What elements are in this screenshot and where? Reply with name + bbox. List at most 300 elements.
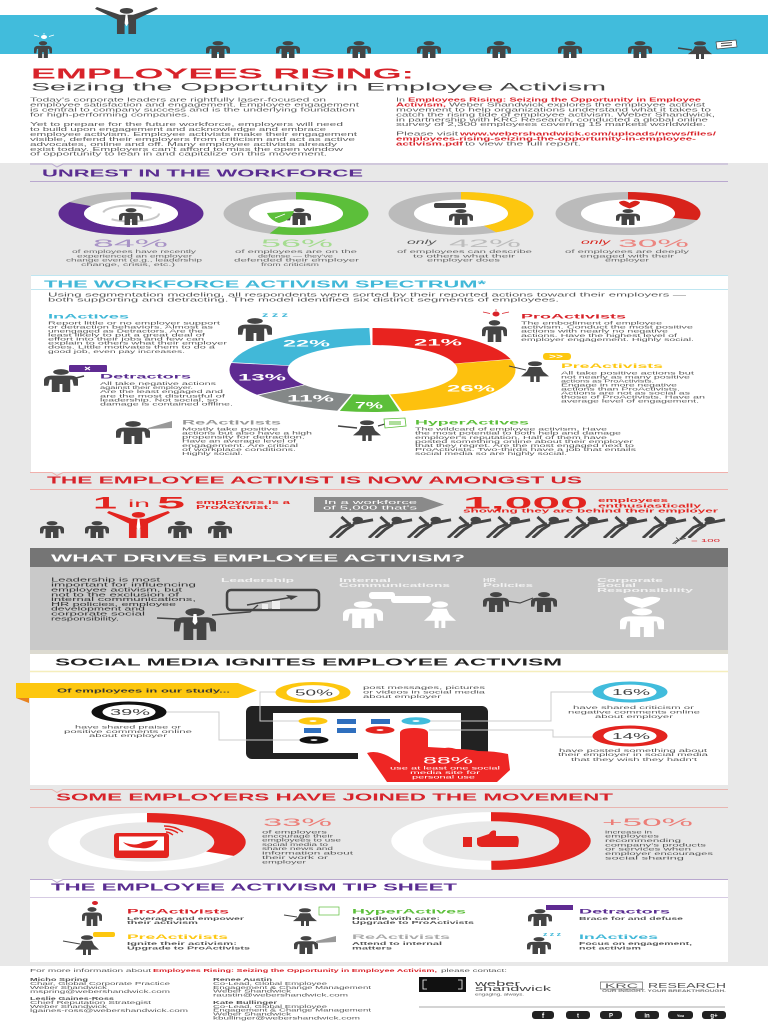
segment labels: 13% xyxy=(238,372,287,384)
PreActivists block: actions as ProActivists. xyxy=(561,378,654,383)
app buttons xyxy=(304,719,425,742)
stat: 1,000 employees xyxy=(463,494,720,515)
stat: 56%: from criticism xyxy=(261,262,319,268)
tip: PreActivists: Upgrade to ProActivists xyxy=(127,945,251,951)
ReActivists block xyxy=(182,420,313,456)
logo: weber shandwick xyxy=(419,977,552,996)
stat: 1,000 employees: 1,000 xyxy=(463,494,588,512)
contacts right: Kate Bullinger xyxy=(213,1000,277,1005)
stat ring: 39%: positive comments online xyxy=(64,729,193,734)
intro text: both supporting and detracting. The model identified six distinct segments of employees. xyxy=(48,297,559,303)
PreActivists block: average level of engagement. xyxy=(561,398,699,403)
stat: +50%: social sharing xyxy=(605,855,685,860)
contact intro: please contact: xyxy=(441,968,507,973)
contacts left: lgaines-ross@webershandwick.com xyxy=(30,1008,188,1013)
Detractors block: Are the least engaged and xyxy=(100,389,224,394)
stat: only 30%: of employees are deeply xyxy=(565,249,690,255)
Detractors block: against their employer. xyxy=(100,385,193,390)
intro text right: Activism, xyxy=(396,103,447,109)
panel: employee activist amongst us xyxy=(30,472,728,544)
text block: internal communications, xyxy=(51,597,196,603)
panel: some employers have joined xyxy=(30,790,728,866)
tip: ReActivists: Attend to internal xyxy=(352,941,442,947)
stat: only 42%: of employees can describe xyxy=(397,249,533,255)
stat: 1,000 employees: showing they are behind their employer xyxy=(463,509,720,515)
ReActivists block: Mostly take positive xyxy=(182,427,279,432)
text block: not to the exclusion of xyxy=(51,592,181,598)
icon: shield and figure xyxy=(267,208,311,225)
contacts right: raustin@webershandwick.com xyxy=(213,992,348,997)
tip: HyperActives: HyperActives xyxy=(352,908,467,916)
ReActivists block: Highly social. xyxy=(182,451,243,456)
contacts left: Weber Shandwick xyxy=(30,985,108,990)
stat: only 42%: only xyxy=(407,239,438,246)
stat: 84%: change, crisis, etc.) xyxy=(81,262,176,268)
contacts left: Micho Spring xyxy=(30,977,88,982)
driver labels: Leadership xyxy=(221,578,296,584)
intro text left: employee satisfaction and engagement. Employee engagement xyxy=(30,103,360,109)
tip: ReActivists xyxy=(294,934,451,954)
PreActivists block: PreActivists xyxy=(561,363,664,370)
logo: KRC research xyxy=(600,982,726,993)
icon: handshake figures xyxy=(483,592,557,612)
ProActivists block: actions with nearly no negative xyxy=(521,328,669,334)
intro text left: of opportunity to lean in and capitalize on this movement. xyxy=(30,152,328,158)
intro text right: in partnership with KRC Research, conducted a global online xyxy=(396,117,708,123)
driver labels xyxy=(221,578,693,594)
PreActivists block: those of ProActivists. Have an xyxy=(561,394,706,399)
stat ring: 50%: about employer xyxy=(363,694,442,699)
panel: tip sheet xyxy=(30,879,728,962)
intro text right: Weber Shandwick explores the employee activist xyxy=(449,103,706,109)
heading: THE WORKFORCE ACTIVISM SPECTRUM* xyxy=(44,280,486,290)
contact intro: For more information about xyxy=(30,968,153,973)
stat: 84%: experienced an employer xyxy=(77,253,193,259)
InActives block xyxy=(48,314,228,354)
InActives block: least likely to put a great deal of xyxy=(48,332,207,338)
icon: detractor figure with sign xyxy=(44,365,107,392)
icon: thumbs up xyxy=(463,830,519,847)
tip: ReActivists: ReActivists xyxy=(352,934,451,941)
tip: Detractors xyxy=(528,905,684,926)
icon: reactivist figure with megaphone xyxy=(116,421,172,444)
social icons: You xyxy=(677,1013,685,1018)
intro text left xyxy=(30,98,360,158)
HyperActives block: The wildcard of employee activism. Have xyxy=(415,427,608,432)
ReActivists block: of workplace conditions. xyxy=(182,447,296,452)
intro text left: advocates, online and off. Many employee activists already xyxy=(30,142,337,148)
stat: 33%: employer xyxy=(262,860,307,865)
contacts left: Chief Reputation Strategist xyxy=(30,1000,153,1005)
stat: +50%: or services when xyxy=(605,846,692,851)
stat: 1 in 5: in xyxy=(128,499,150,510)
callout tag xyxy=(16,683,257,703)
icon: inactive figure with zzz: z z z xyxy=(262,313,288,319)
stat ring: 39%: about employer xyxy=(89,733,168,738)
Detractors block: are the most distrustful of xyxy=(100,393,227,398)
text block: responsibility. xyxy=(51,617,119,623)
logo: weber shandwick: weber xyxy=(473,981,522,988)
stat: 84% xyxy=(66,238,203,268)
tip: InActives: z z z xyxy=(543,932,562,938)
text block: important for influencing xyxy=(51,583,197,589)
intro text right: Employees Rising: Seizing the Opportunity in Employee xyxy=(408,98,701,104)
tip: ReActivists: matters xyxy=(352,945,393,951)
driver labels: Responsibility xyxy=(597,588,693,594)
ProActivists block: ProActivists xyxy=(521,314,627,320)
icon: red hand with 88% xyxy=(367,728,510,782)
stat: only 42%: employer does xyxy=(427,258,501,264)
Detractors block xyxy=(100,374,233,406)
intro text right xyxy=(396,98,717,148)
intro text left: to build upon engagement and acknowledge and embrace xyxy=(30,127,326,133)
InActives block: Report little or no employer support xyxy=(48,320,222,326)
stat: +50%: increase in xyxy=(605,830,653,834)
segment labels: 11% xyxy=(287,394,335,404)
stat ring: 16%: negative comments online xyxy=(568,710,701,715)
stat: only 42%: 42% xyxy=(449,238,522,250)
stat ring: 16%: 16% xyxy=(612,687,651,697)
InActives block: unengaged as Detractors. Are the xyxy=(48,328,204,334)
HyperActives block: employer's reputation. Half of them have xyxy=(415,435,608,440)
HyperActives block: posted something online about their employer xyxy=(415,439,634,444)
icon: leader presenting chart xyxy=(157,590,319,640)
panel: workforce activism spectrum xyxy=(31,275,728,472)
heading: THE EMPLOYEE ACTIVISM TIP SHEET xyxy=(51,882,457,894)
intro text right: to view the full report. xyxy=(465,142,582,148)
contact intro: Employees Rising: Seizing the Opportunity in Employee Activism, xyxy=(153,968,437,973)
driver labels: Corporate xyxy=(597,578,663,584)
contacts right: Co-Lead, Global Employee xyxy=(213,1004,328,1009)
stat ring: 50%: 50% xyxy=(295,688,334,698)
Detractors block: Detractors xyxy=(100,374,192,380)
intro text right: Please visit xyxy=(396,132,459,138)
donut: 50% xyxy=(407,817,575,865)
intro text right: survey of 2,300 employees covering 15 markets worldwide. xyxy=(396,122,707,128)
segment labels: 22% xyxy=(283,338,331,350)
panel: what drives employee activism xyxy=(30,548,728,652)
stat ring: 14%: 14% xyxy=(612,731,651,741)
logo: weber shandwick: engaging, always. xyxy=(475,992,524,996)
InActives block: effort into their jobs and few can xyxy=(48,336,205,342)
stat: +50%: employer encourages xyxy=(605,851,715,856)
intro text right: activism.pdf xyxy=(396,142,463,148)
ProActivists block: activism. Conduct the most positive xyxy=(521,324,694,330)
logo: KRC research: OUR INSIGHT. YOUR BREAKTHROUGH. xyxy=(602,989,726,993)
panel: unrest in the workforce xyxy=(30,164,728,268)
icon: heart and figure xyxy=(616,201,640,225)
segment labels: 26% xyxy=(447,384,496,394)
heading: WHAT DRIVES EMPLOYEE ACTIVISM? xyxy=(51,554,465,564)
title: EMPLOYEES RISING: xyxy=(31,66,414,82)
heading: SOCIAL MEDIA IGNITES EMPLOYEE ACTIVISM xyxy=(55,658,562,668)
tablet xyxy=(166,692,593,761)
icon: figure with sign xyxy=(678,40,737,59)
intro text: Using segmentation modeling, all respondents were sorted by their reported actions toward their employers — xyxy=(48,293,687,299)
icon: red hand with 88%: use at least one social xyxy=(390,766,500,772)
stat: only 42% xyxy=(397,238,533,264)
contacts right xyxy=(213,977,372,1020)
text block: employee activism, but xyxy=(51,588,184,594)
connectors xyxy=(166,692,593,740)
HyperActives block: ProActivists. Two-thirds have a job that entails xyxy=(415,447,638,452)
stat: only 30%: only xyxy=(581,239,612,246)
HyperActives block: the most potential to both help and damage xyxy=(415,431,622,436)
stat: only 30%: engaged with their xyxy=(580,253,675,259)
stat ring: 50%: or videos in social media xyxy=(363,690,486,695)
icon: phone with bird xyxy=(114,826,183,858)
contacts right: kbullinger@webershandwick.com xyxy=(213,1015,360,1020)
tip: InActives: not activism xyxy=(579,945,641,951)
PreActivists block: All take positive actions but xyxy=(561,370,696,375)
stat: 84%: of employees have recently xyxy=(72,249,197,255)
stat: 1,000 employees: employees xyxy=(598,498,668,504)
icon: red hand with 88%: 88% xyxy=(423,756,474,766)
stat: +50%: company's products xyxy=(605,842,708,847)
icon: change arrows and figure xyxy=(103,206,159,225)
legend: figure equals 100: = 100 xyxy=(691,538,721,543)
ProActivists block xyxy=(521,314,694,342)
intro text right: movement to help organizations understand what it takes to xyxy=(396,108,711,114)
tip: Detractors: Detractors xyxy=(579,908,671,916)
ReActivists block: engagement. Are critical xyxy=(182,443,298,448)
stat ring: 39%: have shared praise or xyxy=(75,725,182,730)
HyperActives block: social media so are highly social. xyxy=(415,451,567,456)
stat: 56%: defense — they've xyxy=(258,253,334,259)
stat: 1 in 5: employees is a xyxy=(196,500,292,506)
contacts left: Chair, Global Corporate Practice xyxy=(30,981,171,986)
pictogram: 1 in 5 figures xyxy=(40,511,232,538)
icon: preactivist figure with bubble: >> xyxy=(549,354,564,360)
stat: 84%: change event (e.g., leadership xyxy=(66,258,203,264)
stat: 56%: 56% xyxy=(261,238,334,250)
spectrum donut chart xyxy=(238,337,496,412)
ProActivists block: The embodiment of employee xyxy=(521,320,663,326)
contacts left: Leslie Gaines-Ross xyxy=(30,996,115,1001)
stat ring: 39% xyxy=(64,703,193,738)
ReActivists block: ReActivists xyxy=(182,420,282,426)
icon: preactivist figure with bubble xyxy=(509,353,571,382)
stat ring: 14%: their employer in social media xyxy=(558,752,709,757)
icon: proactivist figure with bulb xyxy=(482,309,509,342)
tip: Detractors: Brace for and defuse xyxy=(579,916,684,922)
text block: HR policies, employee xyxy=(51,602,177,608)
social icons: f xyxy=(542,1013,545,1020)
driver labels: Policies xyxy=(483,583,533,589)
footer xyxy=(30,968,726,1020)
tip: HyperActives xyxy=(284,907,475,926)
donut: 42% xyxy=(401,196,521,231)
social icons xyxy=(532,1011,726,1020)
intro text left: is central to company success and is the underlying foundation xyxy=(30,108,355,114)
stat: 56%: defended their employer xyxy=(234,258,360,264)
contacts right: Weber Shandwick xyxy=(213,1011,292,1016)
legend: figure equals 100 xyxy=(673,538,721,544)
icon: speech bubble and figure xyxy=(434,203,473,225)
driver labels: Communications xyxy=(339,583,450,589)
stat: only 30%: 30% xyxy=(618,238,690,250)
HyperActives block: that they regret. Are the most engaged next to xyxy=(415,443,635,448)
heading: THE EMPLOYEE ACTIVIST IS NOW AMONGST US xyxy=(47,476,583,486)
Detractors block: leadership. Not social, so xyxy=(100,397,219,402)
intro text right: employees-rising-seizing-the-opportunity-in-employee- xyxy=(396,136,696,142)
segment labels: 21% xyxy=(414,338,463,348)
intro text xyxy=(48,293,687,303)
contacts right: Weber Shandwick xyxy=(213,989,292,994)
text block: development and xyxy=(51,607,146,613)
icon: red hand with 88%: media site for xyxy=(410,770,481,776)
icon: heart and figure xyxy=(620,597,664,637)
stat: 33%: 33% xyxy=(263,817,333,829)
row of employee figures xyxy=(206,41,652,58)
InActives block: does. Little motivates them to do a xyxy=(48,344,216,350)
stat ring: 16% xyxy=(568,683,701,719)
stat ring: 14%: that they wish they hadn't xyxy=(571,757,699,762)
contact intro xyxy=(30,968,507,973)
tip: PreActivists xyxy=(63,932,251,955)
driver labels: Social xyxy=(597,583,637,589)
stat: +50%: employees xyxy=(605,834,661,838)
stat: +50% xyxy=(602,817,715,860)
InActives block: or detraction behaviors. Almost as xyxy=(48,324,215,330)
tip: ProActivists: their activism xyxy=(127,920,198,926)
intro text left: employee activism. Employee activists make their engagement xyxy=(30,132,358,138)
stat ring: 14% xyxy=(558,727,709,762)
intro text right: www.webershandwick.com/uploads/news/files/ xyxy=(458,132,717,138)
tip: PreActivists: Ignite their activism: xyxy=(127,941,238,947)
donut: 84% xyxy=(71,196,191,231)
tip: ProActivists xyxy=(82,901,244,926)
InActives block: explain to others what their employer xyxy=(48,340,228,346)
stat: 33%: their work or xyxy=(262,855,329,860)
subtitle: Seizing the Opportunity in Employee Activism xyxy=(31,82,606,94)
tip: InActives: Focus on engagement, xyxy=(579,941,693,947)
PreActivists block xyxy=(561,363,706,403)
header banner xyxy=(0,7,768,59)
donut: 30% xyxy=(568,196,688,231)
stat: 33% xyxy=(262,817,355,865)
heading: UNREST IN THE WORKFORCE xyxy=(42,168,364,180)
pictogram: ten leaning figures xyxy=(330,517,725,538)
icon: inactive figure with zzz xyxy=(238,313,288,341)
contacts left: mspring@webershandwick.com xyxy=(30,989,170,994)
donut: 33% xyxy=(64,818,230,866)
tip: InActives xyxy=(527,932,693,954)
stat: 1 in 5 xyxy=(93,494,292,512)
segment labels: 7% xyxy=(355,400,384,412)
contacts left: Weber Shandwick xyxy=(30,1004,108,1009)
arrow: workforce of 5,000: of 5,000 that's xyxy=(323,505,418,511)
callout tag: Of employees in our study... xyxy=(57,689,231,695)
icon: lightbulb figure xyxy=(34,33,54,58)
PreActivists block: Engage in more negative xyxy=(561,382,678,387)
heading: SOME EMPLOYERS HAVE JOINED THE MOVEMENT xyxy=(56,792,613,804)
intro text left: exist today. Employers can't afford to miss the open window xyxy=(30,147,345,153)
contacts right: Engagement & Change Management xyxy=(213,1008,372,1013)
stat ring: 14%: have posted something about xyxy=(559,748,709,753)
contacts right: Co-Lead, Global Employee xyxy=(213,981,328,986)
ProActivists block: employer engagement. Highly social. xyxy=(521,337,694,342)
social icons: g+ xyxy=(710,1014,718,1020)
tip: ProActivists: ProActivists xyxy=(127,908,230,916)
icon: hyperactive figure with cape and sign xyxy=(338,418,406,441)
icon: conversing figures xyxy=(343,592,456,628)
text block: corporate social xyxy=(51,612,145,618)
stat: 33%: share news and xyxy=(262,846,334,851)
icon: central raised-arms figure xyxy=(95,7,158,34)
PreActivists block: Actions are not as social as xyxy=(561,390,691,395)
InActives block: InActives xyxy=(48,314,130,320)
tip: InActives: InActives xyxy=(579,934,659,941)
HyperActives block: HyperActives xyxy=(415,420,530,426)
tip: PreActivists: PreActivists xyxy=(127,934,229,941)
Detractors block: damage is contained offline. xyxy=(100,401,233,406)
stat ring: 50% xyxy=(281,684,487,701)
ReActivists block: Have an average level of xyxy=(182,439,298,444)
stat ring: 16%: have shared criticism or xyxy=(573,705,695,710)
stat: 56% xyxy=(234,238,360,268)
gray page background xyxy=(0,163,768,966)
text block xyxy=(51,578,197,623)
tip: ProActivists: Leverage and empower xyxy=(127,916,244,922)
social icons: in xyxy=(644,1014,650,1020)
panel: social media ignites xyxy=(16,650,728,785)
stat: 33%: information about xyxy=(262,850,355,855)
arrow: workforce of 5,000 xyxy=(314,497,444,512)
donut: 56% xyxy=(236,196,356,231)
Detractors block: All take negative actions xyxy=(100,381,217,386)
ProActivists block: actions. Have the highest level of xyxy=(521,333,679,338)
text block: Leadership is most xyxy=(51,578,162,584)
intro text right: In xyxy=(396,98,405,104)
stat: 1 in 5: 5 xyxy=(157,494,185,512)
PreActivists block: not nearly as many positive xyxy=(561,374,691,379)
intro text left: Yet to prepare for the future workforce, employers will need xyxy=(30,122,343,128)
stat: 56%: of employees are on the xyxy=(235,249,358,255)
driver labels: HR xyxy=(483,578,496,584)
stat ring: 39%: 39% xyxy=(110,707,151,717)
logo: KRC research: KRC xyxy=(605,983,639,990)
arrow: workforce of 5,000: In a workforce xyxy=(324,500,417,506)
tip: HyperActives: Handle with care: xyxy=(352,916,441,922)
stat: 1 in 5: ProActivist. xyxy=(196,505,273,511)
stat ring: 50%: post messages, pictures xyxy=(363,685,487,690)
tip: HyperActives: Upgrade to ProActivists xyxy=(352,920,475,926)
logo: KRC research: RESEARCH xyxy=(648,983,726,990)
segment labels xyxy=(238,338,496,412)
ReActivists block: actions but also have a high xyxy=(182,431,313,436)
PreActivists block: actions than ProActivists. xyxy=(561,386,680,391)
stat: 84%: 84% xyxy=(93,238,169,250)
stat: 33%: of employers xyxy=(262,830,329,834)
ReActivists block: propensity for detraction. xyxy=(182,435,305,440)
InActives block: good job, even pay increases. xyxy=(48,349,185,354)
intro text left: Today's corporate leaders are rightfully laser-focused on xyxy=(30,98,326,104)
social icons: t xyxy=(577,1014,579,1020)
stat: only 42%: to others what their xyxy=(413,253,516,259)
stat: only 30%: employer xyxy=(605,258,650,264)
HyperActives block xyxy=(415,420,638,456)
stat: +50%: recommending xyxy=(605,838,682,843)
contacts right: Renee Austin xyxy=(213,977,272,982)
contacts left xyxy=(30,977,188,1013)
stat: +50%: +50% xyxy=(602,817,694,829)
social icons: P xyxy=(609,1014,613,1020)
stat: 33%: encourage their xyxy=(262,834,334,838)
intro text left: visible, defend their employers from criticism and act as active xyxy=(30,137,355,143)
stat: 33%: employees to use xyxy=(262,838,342,842)
driver labels: Internal xyxy=(339,578,392,584)
